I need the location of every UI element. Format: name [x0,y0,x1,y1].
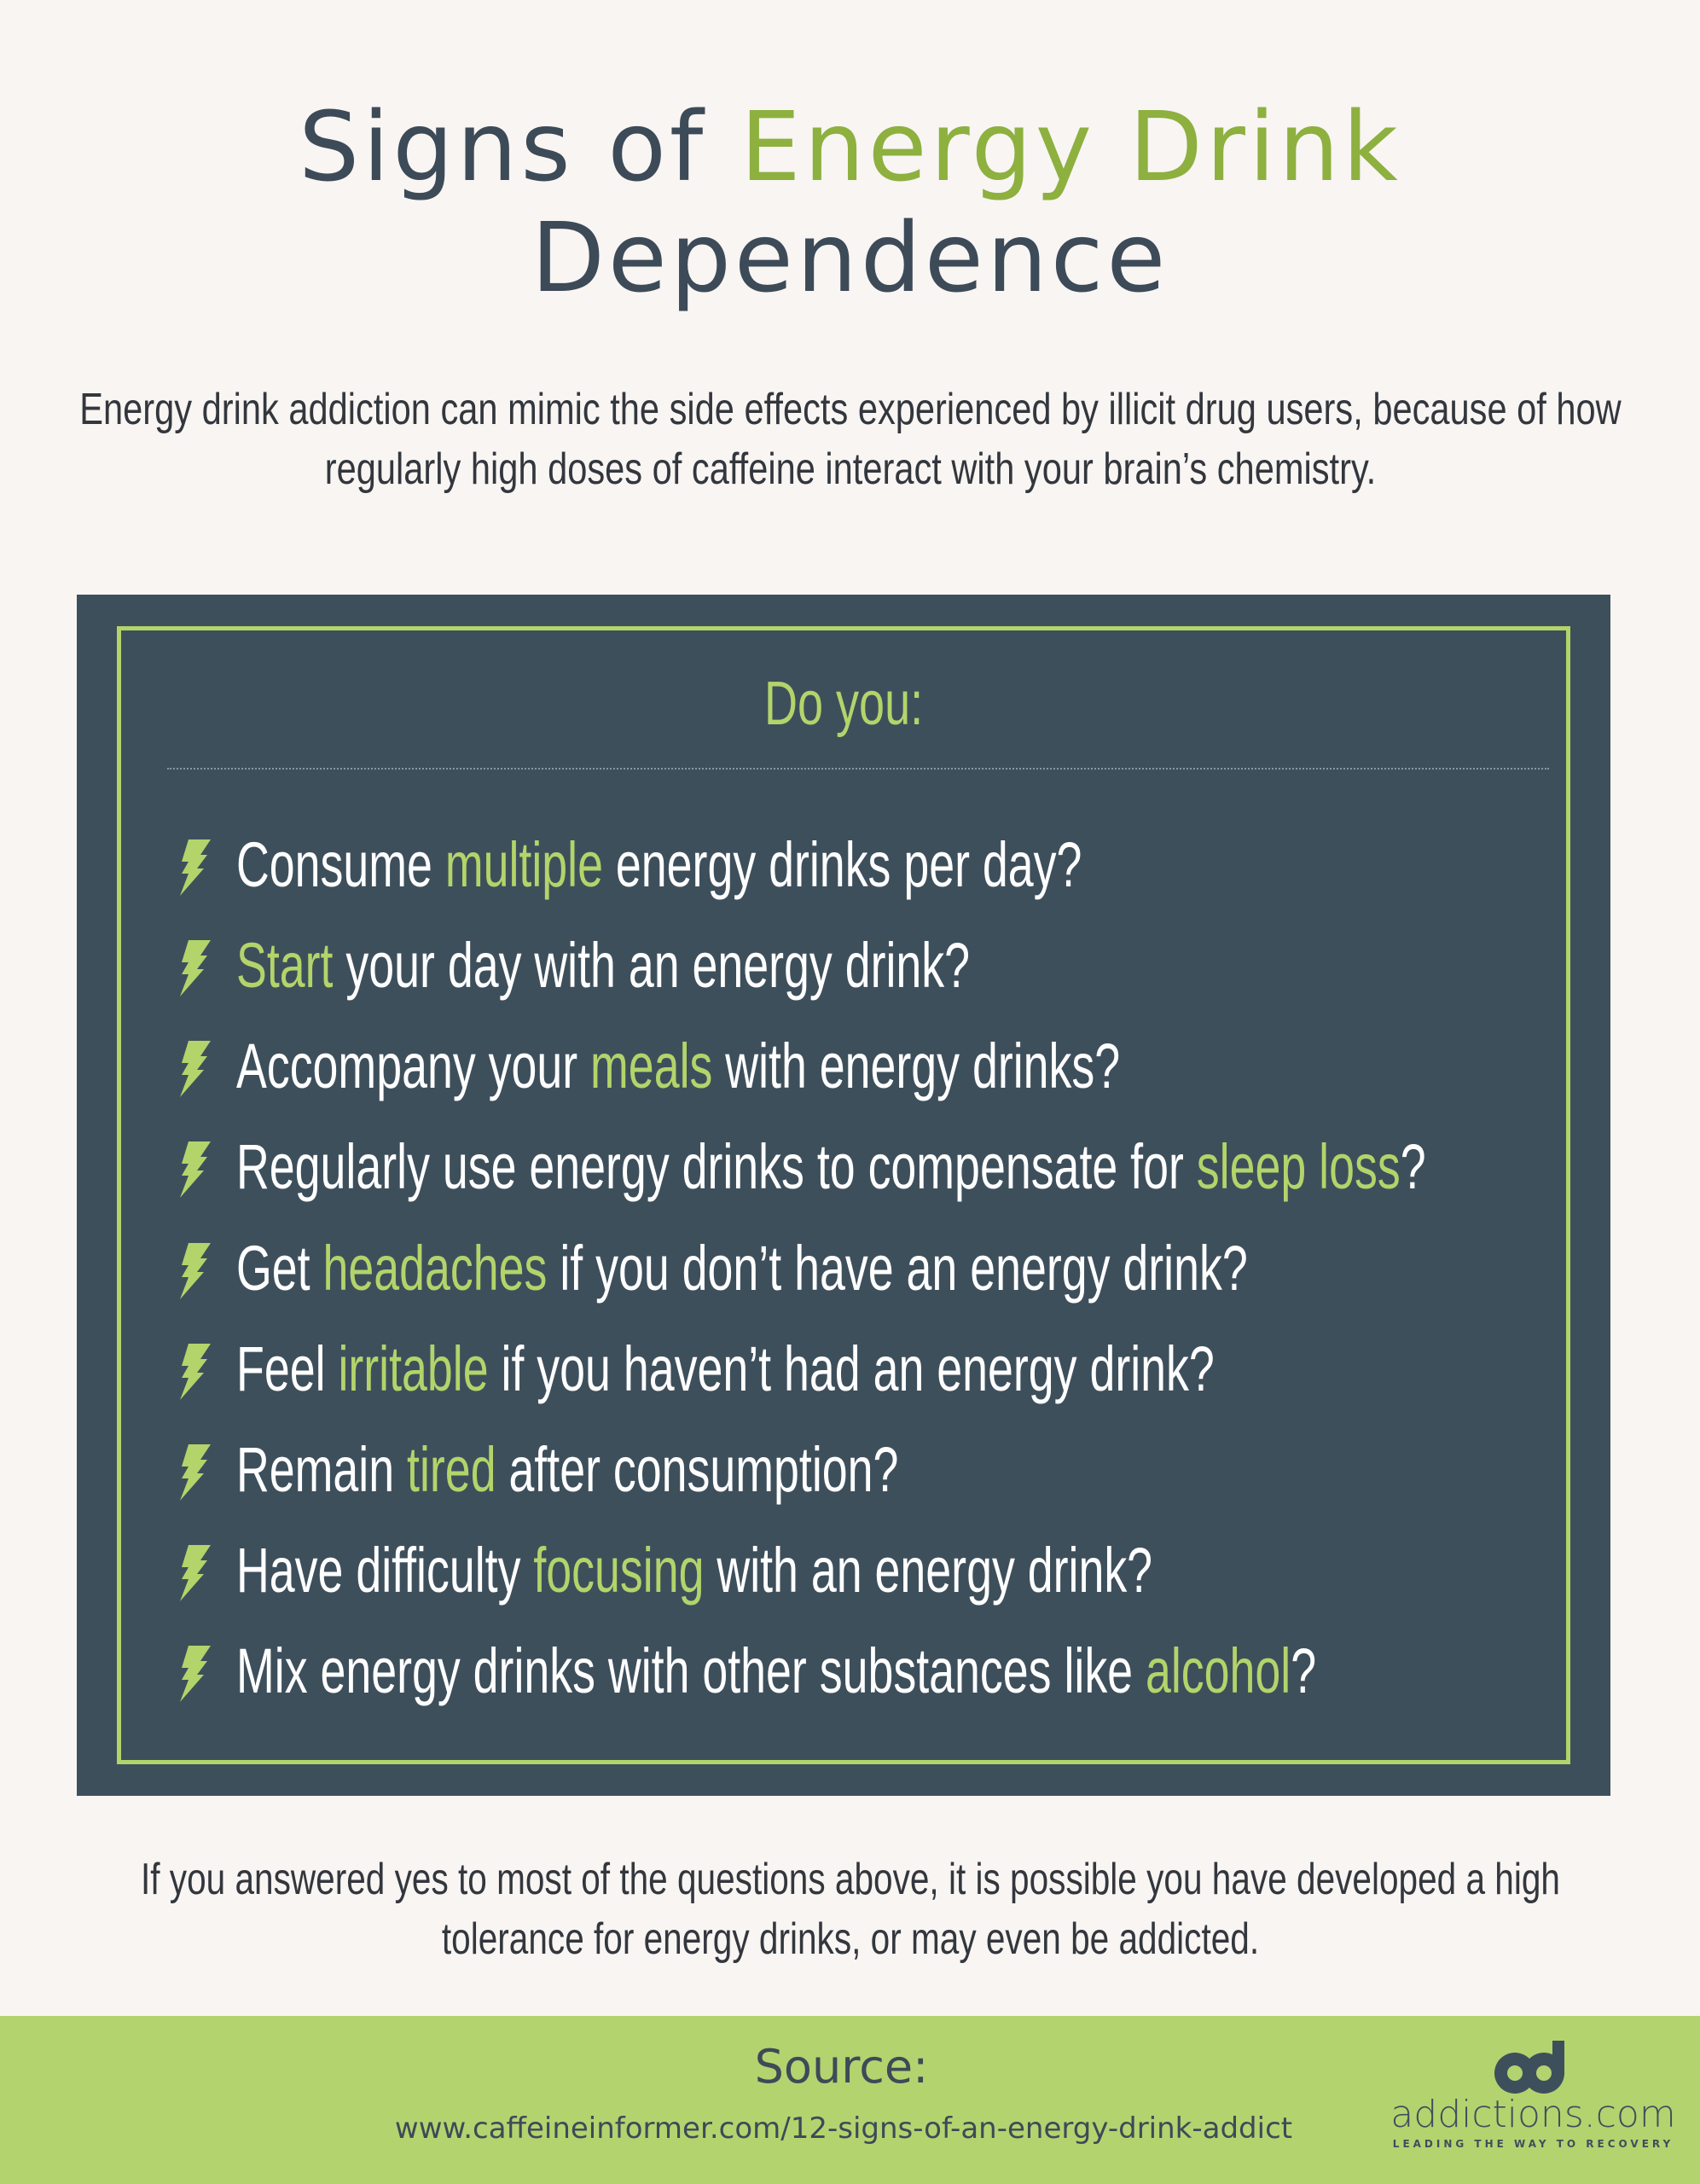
icon: ad mark [1494,2041,1564,2094]
question 1: Consume multiple energy drinks per day? [236,829,1082,900]
logo text: addictions.com [1390,2093,1676,2136]
conclusion text: tolerance for energy drinks, or may even be addicted. [441,1914,1259,1964]
icons: lightning bolts [180,839,211,1702]
logo: addictions.com [1390,2041,1676,2150]
title: Signs of Energy Drink [299,92,1401,203]
question 9: Mix energy drinks with other substances like alcohol? [236,1635,1316,1706]
footer: source [0,2016,1700,2184]
heading: Do you: Do you: [764,670,923,738]
logo tagline: LEADING THE WAY TO RECOVERY [1393,2138,1674,2150]
question 8: Have difficulty focusing with an energy drink? [236,1535,1152,1606]
intro text: regularly high doses of caffeine interact with your brain’s chemistry. [324,444,1376,494]
intro text [79,385,1622,494]
source label: Source: [755,2040,928,2094]
question 2: Start your day with an energy drink? [236,930,970,1001]
conclusion text: If you answered yes to most of the questions above, it is possible you have developed a high [141,1855,1559,1904]
source url: www.caffeineinformer.com/12-signs-of-an-energy-drink-addict [395,2111,1292,2146]
question 5: Get headaches if you don’t have an energy drink? [236,1233,1248,1304]
conclusion text [141,1855,1559,1964]
question 3: Accompany your meals with energy drinks? [236,1031,1120,1101]
question 4: Regularly use energy drinks to compensate for sleep loss? [236,1131,1426,1202]
title [299,92,1401,314]
question 6: Feel irritable if you haven’t had an energy drink? [236,1333,1215,1404]
intro text: Energy drink addiction can mimic the side effects experienced by illicit drug users, because of how [79,385,1621,434]
panel: questions [77,595,1610,1796]
title: Dependence [531,203,1169,314]
question 7: Remain tired after consumption? [236,1434,898,1505]
